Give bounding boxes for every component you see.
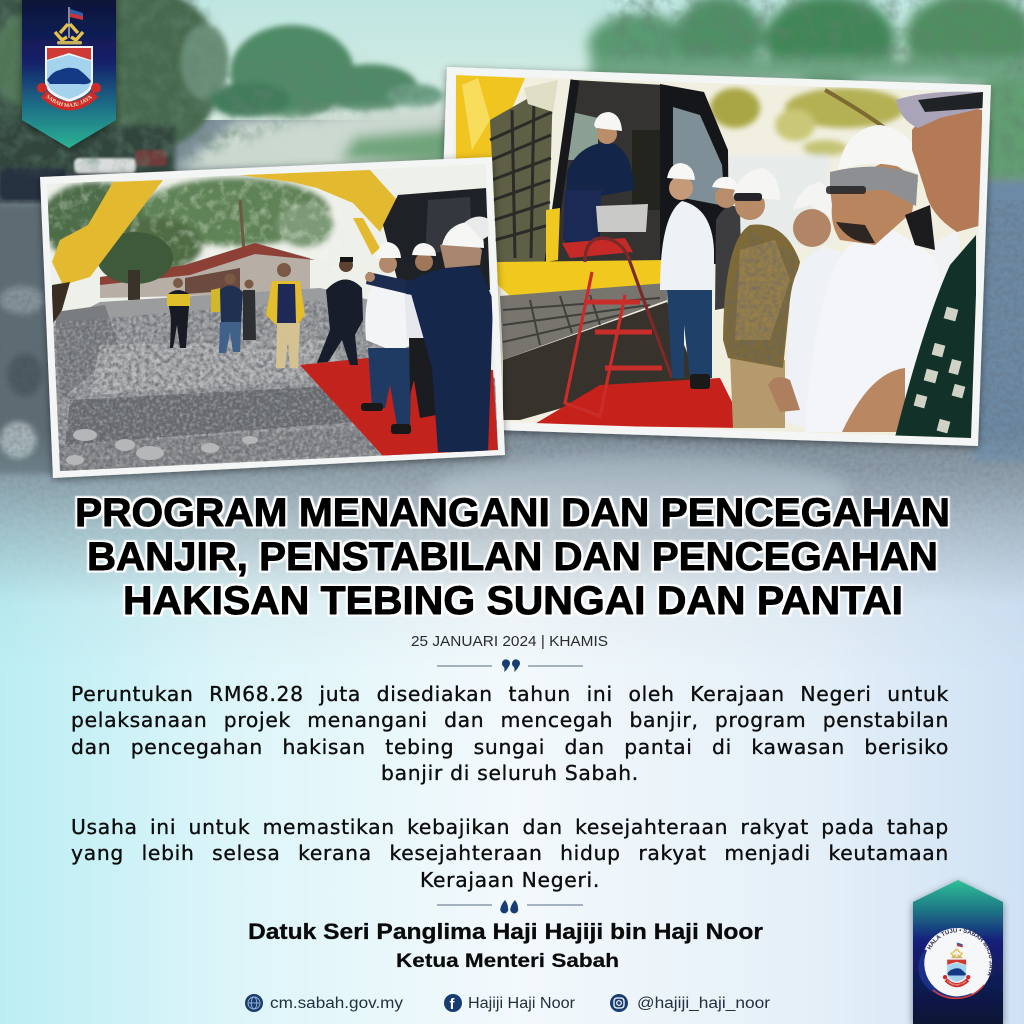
background: centre trees (210, 25, 443, 119)
background: foliage texture (0, 0, 1024, 173)
badge: Hala Tuju Sabah Maju Jaya (918, 928, 994, 1000)
background: right water (975, 182, 1024, 462)
man dark green batik shirt (895, 235, 976, 440)
paragraph two (71, 815, 949, 892)
footer: website: cm.sabah.gov.my (270, 995, 403, 1012)
author name: Datuk Seri Panglima Haji Hajiji bin Haji Noor (248, 919, 763, 944)
paragraph two: Kerajaan Negeri. (420, 868, 600, 892)
man white shirt, middle (785, 247, 846, 430)
foliage (710, 88, 905, 245)
cab interior (552, 80, 664, 262)
photo: Site visit on gravel riverbank (40, 157, 505, 478)
excavator arm, yellow (456, 75, 525, 214)
right man face (912, 108, 982, 232)
background: left rocks (0, 204, 60, 474)
crawler tracks (500, 283, 667, 360)
trees (40, 178, 333, 273)
paragraph one: Peruntukan RM68.28 juta disediakan tahun ini oleh Kerajaan Negeri untuk (71, 682, 949, 706)
officer in dark uniform (317, 279, 363, 365)
paragraph one: pelaksanaan projek menangani dan mencegah banjir, program penstabilan (71, 708, 949, 732)
background: pale lower gradient (0, 430, 1024, 1024)
divider: opening quote mark (437, 659, 583, 672)
background: parked cars (0, 150, 175, 204)
background: riverbank ground (175, 105, 450, 172)
man behind, blue collar (404, 294, 424, 340)
paragraph one: banjir di seluruh Sabah. (381, 761, 639, 785)
background: right trees (588, 0, 1024, 180)
building with red roof (100, 243, 310, 298)
title (75, 491, 950, 623)
driver (565, 142, 634, 245)
man behind (715, 206, 742, 310)
title: PROGRAM MENANGANI DAN PENCEGAHAN (75, 491, 950, 535)
author title: Ketua Menteri Sabah (396, 950, 619, 972)
yellow body (497, 260, 664, 296)
worker in yellow and navy jacket (266, 281, 305, 324)
footer: facebook: Hajiji Haji Noor (468, 995, 575, 1012)
cab door and window (660, 84, 729, 264)
group of workers (211, 288, 220, 312)
paragraph one: dan pencegahan hakisan tebing sungai dan pantai di kawasan berisiko (71, 735, 949, 759)
gravel ground (47, 288, 498, 472)
footer: facebook: f (450, 996, 456, 1013)
man in navy pointing (366, 272, 412, 295)
divider: closing quote mark (437, 900, 583, 913)
badge: Hala Tuju Sabah Maju Jaya: HALA TUJU • SABAH MAJU JAYA (927, 928, 994, 976)
footer: instagram: @hajiji_haji_noor (637, 995, 770, 1012)
excavator grille (490, 84, 553, 262)
man in batik (730, 355, 785, 428)
yellow boom (52, 180, 163, 285)
photo: Excavator visit, officials in hard hats (434, 67, 991, 446)
red carpet (300, 358, 498, 456)
background: left tree mass (0, 0, 229, 185)
banner: bottom right with round badge (908, 878, 1008, 1024)
banner: Sabah crest top left (22, 0, 116, 148)
red carpet (533, 378, 745, 428)
title: BANJIR, PENSTABILAN DAN PENCEGAHAN (87, 535, 938, 579)
icon: Sabah coat of arms (37, 7, 101, 109)
man in white shirt (660, 201, 714, 290)
paragraph two: yang lebih selesa kerana kesejahteraan hidup rakyat menjadi keutamaan (71, 841, 949, 865)
man in white shirt (365, 286, 410, 348)
rocks in foreground (66, 429, 258, 465)
paragraph one (71, 682, 949, 785)
excavator cab (383, 188, 490, 290)
date line: 25 JANUARI 2024 | KHAMIS (411, 634, 608, 650)
title: HAKISAN TEBING SUNGAI DAN PANTAI (123, 579, 903, 623)
man white shirt, foreground (805, 228, 950, 432)
paragraph two: Usaha ini untuk memastikan kebajikan dan kesejahteraan rakyat pada tahap (71, 815, 949, 839)
red step ladder (565, 238, 672, 416)
worker far left (167, 290, 190, 348)
man white between (932, 232, 960, 268)
